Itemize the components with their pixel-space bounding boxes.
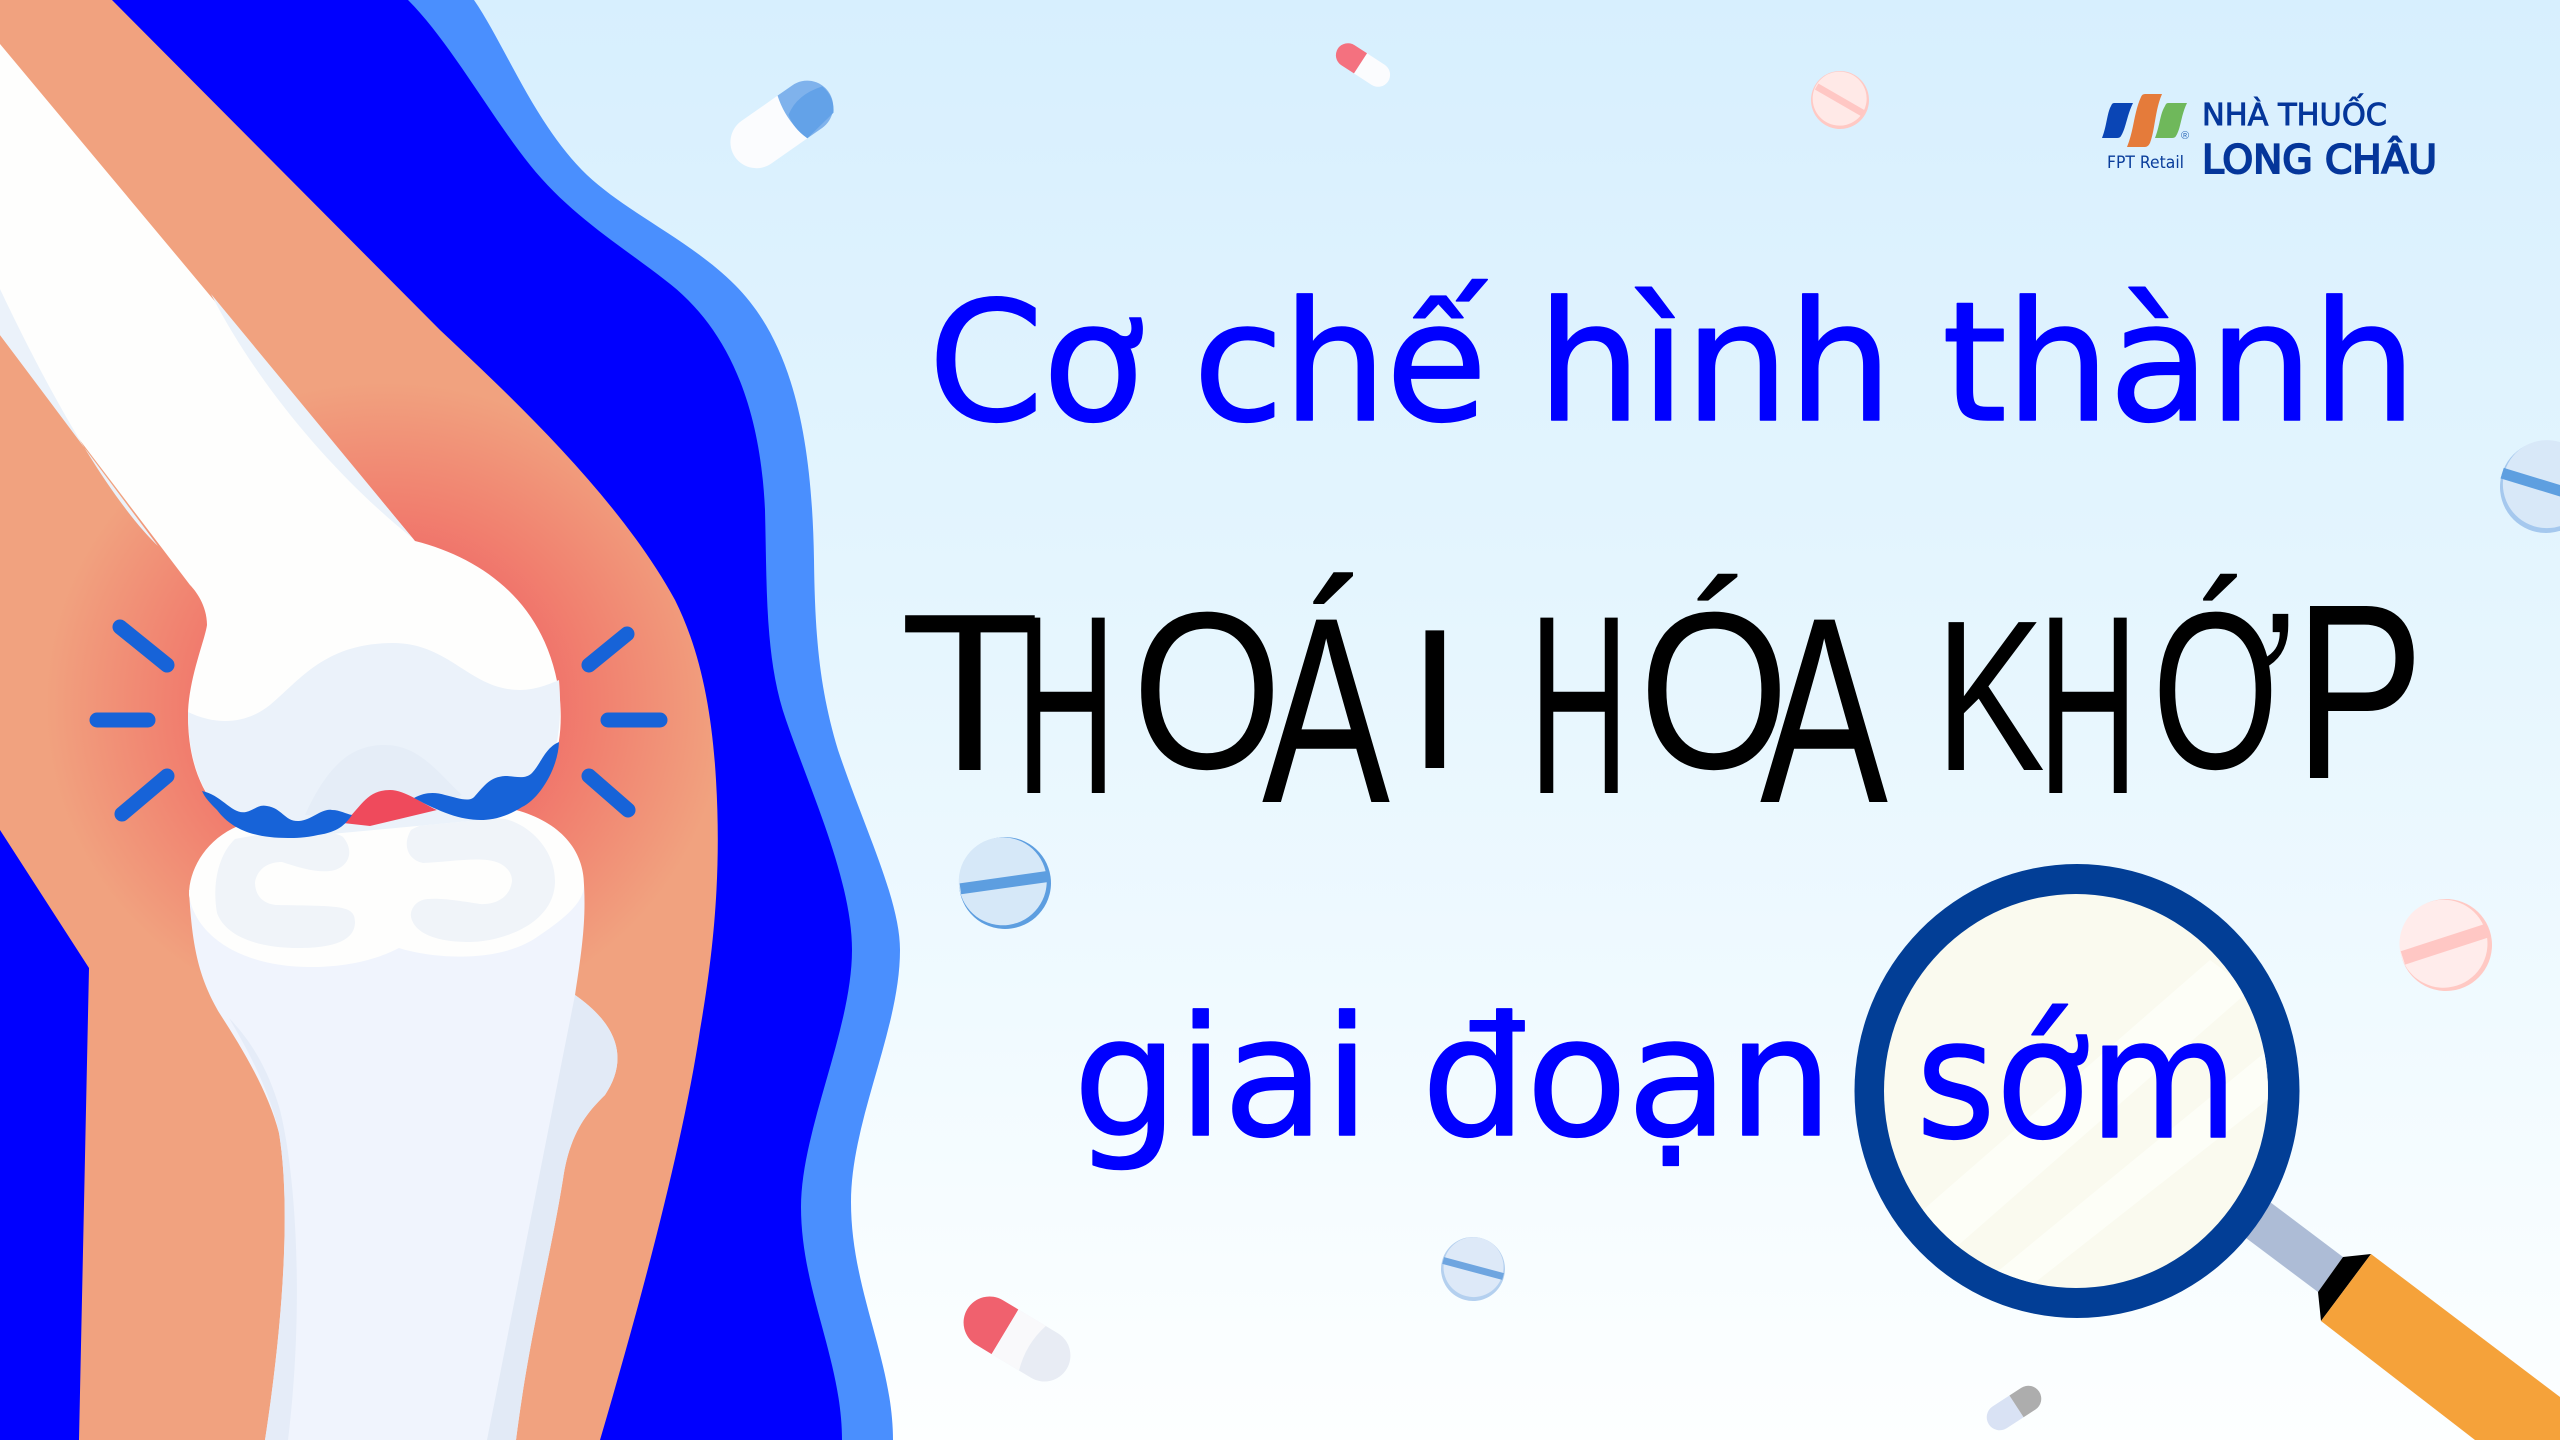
magnifier neck (2246, 1202, 2343, 1292)
pill: blue bottom (1434, 1230, 1512, 1308)
cartilage right (414, 742, 559, 820)
title line 2 handwritten: Ó (1639, 566, 1789, 816)
magnifying glass (1854, 864, 2560, 1440)
magnifier handle (2321, 1254, 2560, 1440)
title line 2 handwritten: Á (1262, 563, 1391, 859)
femur right edge shade (211, 294, 415, 541)
tibia head (189, 810, 584, 967)
logo blue leaf (2102, 103, 2133, 138)
tibia shaft (189, 885, 617, 1440)
illustration: knee joint (0, 0, 900, 1440)
title line 2 handwritten: O (1132, 566, 1282, 816)
logo green leaf (2155, 103, 2187, 138)
pill: pink top (1800, 60, 1880, 140)
pain mark middle left (97, 712, 148, 728)
FPT Retail label: FPT Retail (2107, 153, 2184, 173)
dark blue band (0, 0, 852, 1440)
capsule: red and white bottom (954, 1287, 1080, 1391)
magnifier collar (2318, 1254, 2371, 1321)
title line 2 handwritten: H (1529, 563, 1629, 848)
cartilage left (202, 791, 352, 838)
title line 2 handwritten: I (1407, 588, 1518, 811)
title line 2 handwritten: A (1760, 563, 1889, 859)
tibia head left marrow (215, 831, 355, 948)
lens glare (1923, 976, 2268, 1284)
registered mark: ® (2181, 130, 2189, 142)
leg skin with inflammation glow (0, 0, 718, 1440)
pain mark top left (120, 627, 167, 665)
pain marks (97, 627, 660, 814)
capsule: grey bottom (1982, 1381, 2046, 1435)
damaged cartilage in red (343, 790, 437, 826)
pill: pink right (2388, 887, 2504, 1003)
capsule: blue and white top (720, 70, 843, 178)
title line 3: giai đoạn (1073, 982, 1833, 1175)
femur left edge shade (0, 289, 158, 546)
title line 2 handwritten: Ớ (2152, 566, 2292, 816)
pill: blue middle (953, 831, 1057, 935)
femur lower shade (188, 643, 560, 838)
tibia right shade (487, 995, 617, 1440)
light blue outer band (0, 0, 900, 1440)
title line 1: Cơ chế hình thành (928, 267, 2417, 460)
pain mark middle right (608, 712, 660, 728)
NHÀ THUỐC label: NHÀ THUỐC (2202, 93, 2387, 133)
title line 2 handwritten: H (1016, 563, 1116, 848)
pill: blue right edge (2489, 429, 2560, 544)
femur (0, 44, 561, 838)
capsule: pink and white top (1331, 39, 1395, 91)
magnifier lens (1884, 894, 2268, 1288)
logo mark (2102, 94, 2187, 147)
femur faint highlight (305, 745, 462, 820)
magnifier rim (1854, 864, 2300, 1318)
title line 2 handwritten: P (2294, 552, 2424, 831)
pain mark bottom left (122, 776, 167, 814)
title line 2 handwritten: K (1935, 575, 2045, 816)
pain mark top right (589, 634, 627, 665)
highlighted word in lens: sớm (1916, 984, 2238, 1177)
tibia left shade (229, 1018, 297, 1440)
title line 2 handwritten: T (900, 566, 1040, 818)
title line 2 handwritten: H (2038, 563, 2138, 848)
LONG CHÂU label: LONG CHÂU (2202, 136, 2437, 183)
tibia head right marrow (407, 818, 555, 942)
pain mark bottom right (589, 776, 628, 810)
logo: FPT Retail, Nhà thuốc Long Châu (2102, 93, 2437, 183)
logo orange leaf (2127, 94, 2162, 147)
